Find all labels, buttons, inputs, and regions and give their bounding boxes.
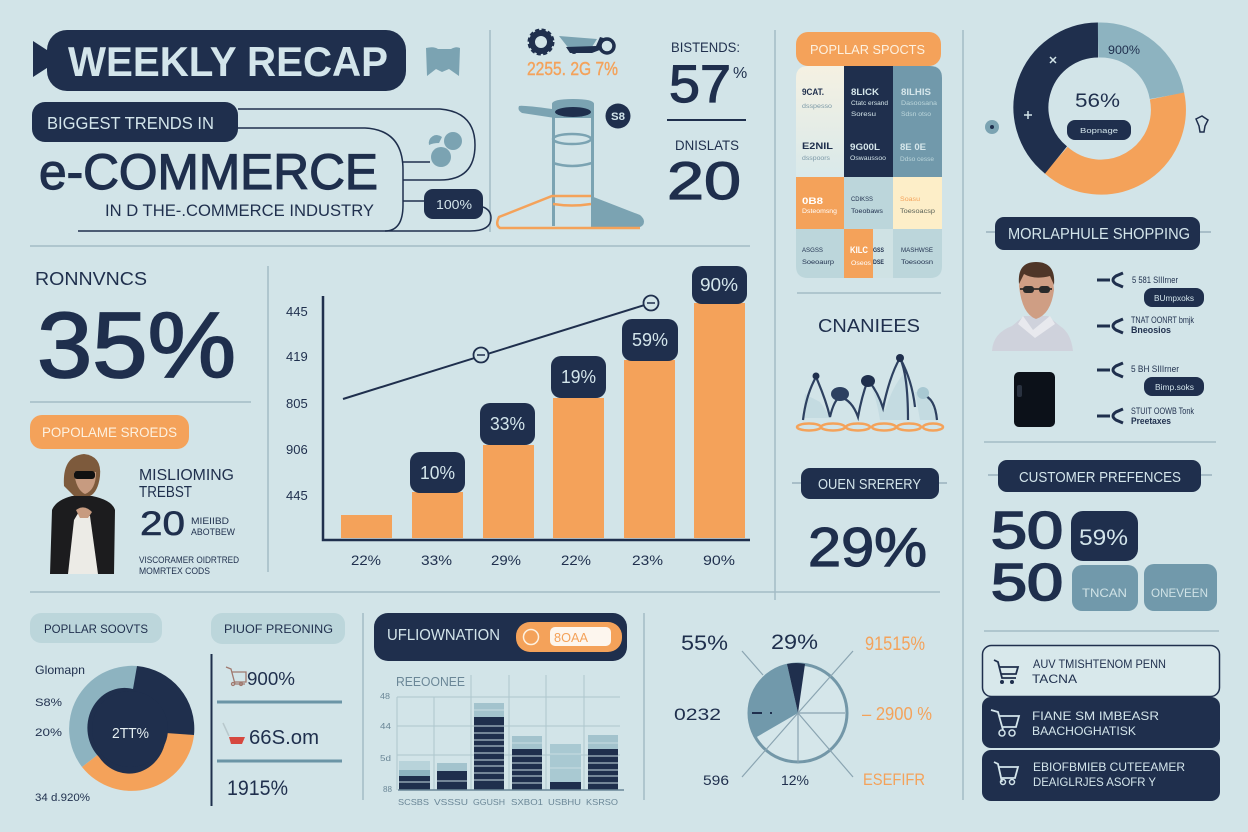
chart axis text: SXBO1: [511, 797, 543, 807]
pie labels: 20%: [35, 727, 62, 739]
banner: [374, 613, 627, 661]
card: navy 1: FIANE SM IMBEASR: [1032, 709, 1159, 723]
person text: MIEIIBD: [191, 516, 229, 527]
orange pill: POPOLAME SROEDS: [42, 424, 177, 440]
x axis labels: 33%: [421, 552, 452, 568]
icon: teal mask: [426, 47, 460, 76]
orange labels: – 2900 %: [862, 704, 932, 724]
table text: Ctatc ersand: [851, 101, 888, 107]
grid: [397, 675, 620, 790]
list text: STUIT OOWB Tonk: [1131, 406, 1194, 416]
value 1: 900%: [247, 669, 295, 689]
title banner: [33, 30, 406, 91]
bar value badges: 90%: [700, 275, 738, 295]
pill heading: [792, 468, 947, 499]
table text: dsspoors: [802, 156, 830, 162]
x axis labels: 22%: [351, 552, 381, 568]
orange labels: ESEFIFR: [863, 770, 925, 789]
person text: 20: [140, 505, 185, 543]
chart title: REEOONEE: [396, 675, 465, 689]
table header: [796, 32, 941, 66]
panel: planning list: [211, 613, 345, 806]
stat value: 35%: [37, 293, 236, 397]
tile: left: TNCAN: [1082, 586, 1127, 600]
list text: TNAT OONRT bmjk: [1131, 315, 1194, 325]
list text: 5 581 SIIIrner: [1132, 275, 1178, 285]
icon: cart outline: [226, 667, 246, 686]
radial labels: 0232: [674, 705, 721, 724]
person text: TREBST: [139, 484, 192, 501]
table text: Oseos: [851, 261, 871, 267]
big number: 20: 20: [667, 152, 741, 211]
chart axis text: VSSSU: [434, 797, 468, 807]
person: woman in sunglasses: [50, 454, 115, 574]
person text: [139, 467, 239, 577]
value 3: 1915%: [227, 777, 288, 800]
icon: small left: [985, 120, 999, 134]
table text: CDIKSS: [851, 197, 873, 203]
illustration: funnel stand: [497, 99, 644, 228]
table text: 9CAT.: [802, 87, 824, 97]
pill heading: OUEN SRERERY: [818, 476, 921, 493]
table text: GSS: [873, 248, 884, 254]
icon: gear: [529, 30, 553, 54]
chart axis text: [380, 691, 618, 807]
person text: MOMRTEX CODS: [139, 566, 210, 577]
table text: [802, 87, 938, 267]
x axis labels: 29%: [491, 552, 521, 568]
tile: left: [1072, 565, 1138, 611]
trend line: [343, 296, 658, 399]
list row icons: [1097, 273, 1123, 423]
table text: MASHWSE: [901, 248, 933, 254]
section heading: [986, 217, 1211, 250]
radial labels: 596: [703, 772, 729, 788]
table text: 8LICK: [851, 87, 880, 97]
x axis labels: 22%: [561, 552, 591, 568]
bar value badges: 19%: [561, 367, 596, 387]
y axis labels: 445: [286, 488, 308, 503]
list pills: BUmpxoks: [1154, 294, 1194, 303]
person text: VISCORAMER OIDRTRED: [139, 555, 239, 566]
chart axis text: KSRSO: [586, 797, 618, 807]
pie chart: [69, 666, 194, 791]
badge: 59%: 59%: [1079, 525, 1128, 550]
card: outlined: [982, 646, 1220, 696]
big number: 57: 57: [669, 55, 731, 114]
title banner: WEEKLY RECAP: [68, 38, 388, 85]
panel: information chart: [374, 613, 627, 807]
orange labels: [862, 634, 932, 789]
bars: [341, 303, 745, 538]
chart axis text: GGUSH: [473, 797, 505, 807]
panel: donut chart top right: [985, 40, 1208, 177]
y axis labels: 906: [286, 442, 308, 457]
card: navy 2: DEAIGLRJES ASOFR Y: [1033, 775, 1156, 789]
big number 1: 50: [991, 502, 1063, 560]
pie labels: Glomapn: [35, 663, 85, 677]
bar value badges: 33%: [490, 414, 525, 434]
panel: mobile shopping: [986, 217, 1211, 427]
banner: 8OAA: [554, 630, 588, 645]
axes: [323, 296, 750, 540]
card: navy 1: BAACHOGHATISK: [1032, 724, 1136, 738]
banner: UFLIOWNATION: [387, 627, 500, 644]
badge: 59%: [1071, 511, 1138, 561]
panel: customer preferences: [982, 460, 1220, 801]
bar stripes: [399, 710, 618, 783]
badge: 100%: [424, 189, 483, 219]
pie labels: [35, 663, 90, 804]
pie: [748, 663, 847, 762]
subtitle pill: BIGGEST TRENDS IN: [47, 113, 214, 133]
table text: Toeobaws: [851, 209, 883, 215]
table text: 0B8: [802, 196, 823, 206]
table text: 9G00L: [850, 142, 881, 152]
table text: Ddso cesse: [900, 157, 935, 163]
x axis labels: 23%: [632, 552, 663, 568]
donut ring: [1031, 40, 1168, 177]
table text: DSE: [873, 260, 884, 266]
orange labels: 91515%: [865, 634, 925, 655]
card: navy 2: [982, 750, 1220, 801]
icon: phone: [1014, 372, 1055, 427]
pie chart: 2TT%: [112, 725, 149, 742]
donut pill: Bopnage: [1080, 128, 1118, 135]
bar value badges: 10%: [420, 463, 455, 483]
chart axis text: 5d: [380, 753, 391, 763]
chart axis text: SCSBS: [398, 797, 429, 807]
orange pill: [30, 415, 189, 449]
section heading: CUSTOMER PREFENCES: [1019, 469, 1181, 486]
person text: MISLIOMING: [139, 467, 234, 484]
list text: Bneosios: [1131, 325, 1171, 335]
tile: right: ONEVEEN: [1151, 586, 1208, 600]
radial labels: 29%: [771, 631, 818, 654]
connector lines: [78, 109, 491, 231]
panel: centre column: [792, 316, 947, 578]
stat: 29%: [808, 516, 927, 578]
tile: right: [1144, 564, 1217, 611]
panel: popular spots table: [796, 32, 942, 278]
table header: POPLLAR SPOCTS: [810, 42, 925, 57]
chart axis text: 88: [383, 784, 392, 794]
table text: Toesoacsp: [900, 209, 936, 215]
panel: top centre illustration: [497, 30, 644, 228]
heading: e-commerce: e-COMMERCE: [39, 144, 378, 200]
card: outlined: AUV TMISHTENOM PENN: [1033, 657, 1166, 671]
table text: Oswaussoo: [850, 156, 887, 162]
badge: small circle: [606, 104, 630, 128]
y axis labels: [286, 304, 308, 503]
pill heading: [30, 613, 162, 643]
table text: 8E 0E: [900, 142, 926, 152]
label 2: DNISLATS: [675, 137, 739, 153]
list pills: [1144, 288, 1204, 396]
stat label: RONNVNCS: [35, 269, 147, 289]
percent sign: %: [733, 65, 747, 82]
ring marks: [1024, 57, 1056, 119]
badge: 100%: 100%: [436, 197, 472, 212]
table text: 8ILHIS: [901, 87, 931, 97]
panel: top stats: [667, 39, 747, 211]
industry caption: IN D THE-.COMMERCE INDUSTRY: [105, 202, 374, 220]
panel: popular donut bottom left: [30, 613, 194, 804]
bar value badges: 59%: [632, 330, 668, 350]
label: BISTENDS:: [671, 39, 740, 55]
icon: small right: [1196, 116, 1208, 132]
chart axis text: 44: [380, 721, 391, 731]
section heading: MORLAPHULE SHOPPING: [1008, 226, 1190, 243]
illustration: arches: [797, 354, 943, 430]
chart axis text: USBHU: [548, 797, 581, 807]
donut label: 900%: [1108, 43, 1140, 57]
card: outlined: TACNA: [1032, 672, 1077, 686]
table text: Soresu: [851, 112, 876, 118]
table text: KILC: [850, 245, 868, 255]
pie labels: 34 d.920%: [35, 792, 90, 804]
radial labels: 55%: [681, 632, 728, 655]
pointer lines: [742, 651, 853, 777]
pie labels: S8%: [35, 697, 62, 709]
donut value: 56%: [1075, 91, 1120, 112]
table text: dsspesso: [802, 104, 833, 110]
x axis labels: 90%: [703, 552, 735, 568]
pill heading: POPLLAR SOOVTS: [44, 622, 148, 636]
donut pill: [1067, 120, 1131, 140]
list text: Preetaxes: [1131, 416, 1171, 426]
y axis labels: 805: [286, 396, 308, 411]
panel: radial pie bottom centre: [674, 631, 932, 789]
stacked bars: [399, 703, 618, 790]
orange stat: 2255. 2G 7%: [527, 59, 618, 79]
big number 2: 50: [991, 554, 1063, 612]
table cells: [796, 66, 942, 278]
table text: Dsteomsng: [802, 209, 837, 215]
x axis labels: [351, 552, 735, 568]
pill heading: PIUOF PREONING: [224, 622, 333, 636]
value 2: 66S.om: [249, 727, 319, 749]
table text: Sdsn otso: [901, 112, 932, 118]
radial labels: 12%: [781, 772, 809, 788]
panel: main bar chart: [286, 266, 750, 568]
bar value badges: [410, 266, 747, 493]
person text: ABOTBEW: [191, 527, 235, 538]
table text: Dasoosana: [901, 101, 938, 107]
list pills: Bimp.soks: [1155, 383, 1194, 392]
card: navy 2: EBIOFBMIEB CUTEEAMER: [1033, 760, 1185, 774]
y axis labels: 445: [286, 304, 308, 319]
radial labels: [674, 631, 818, 788]
table text: E2NIL: [802, 141, 834, 151]
table text: Soasu: [900, 197, 920, 203]
y axis labels: 419: [286, 349, 308, 364]
table text: Toesoosn: [901, 260, 933, 266]
card: navy 1: [982, 697, 1220, 748]
chart axis text: 48: [380, 691, 390, 701]
pill heading: [211, 613, 345, 644]
person: man with glasses: [992, 262, 1073, 351]
icon: bubbles: [429, 132, 462, 167]
icon: red cart: [223, 723, 245, 744]
heading: CNANIEES: [818, 316, 920, 336]
section heading: [988, 460, 1212, 492]
table text: Soeoaurp: [802, 260, 835, 266]
list text: [1131, 275, 1194, 426]
table text: ASGSS: [802, 248, 823, 254]
panel: title block: [32, 30, 491, 231]
panel: left main stat: [30, 269, 239, 577]
icon: truck: [559, 36, 614, 54]
list text: 5 BH SIIIrner: [1131, 364, 1179, 374]
subtitle pill: [32, 102, 238, 142]
badge: small circle: S8: [611, 111, 625, 123]
